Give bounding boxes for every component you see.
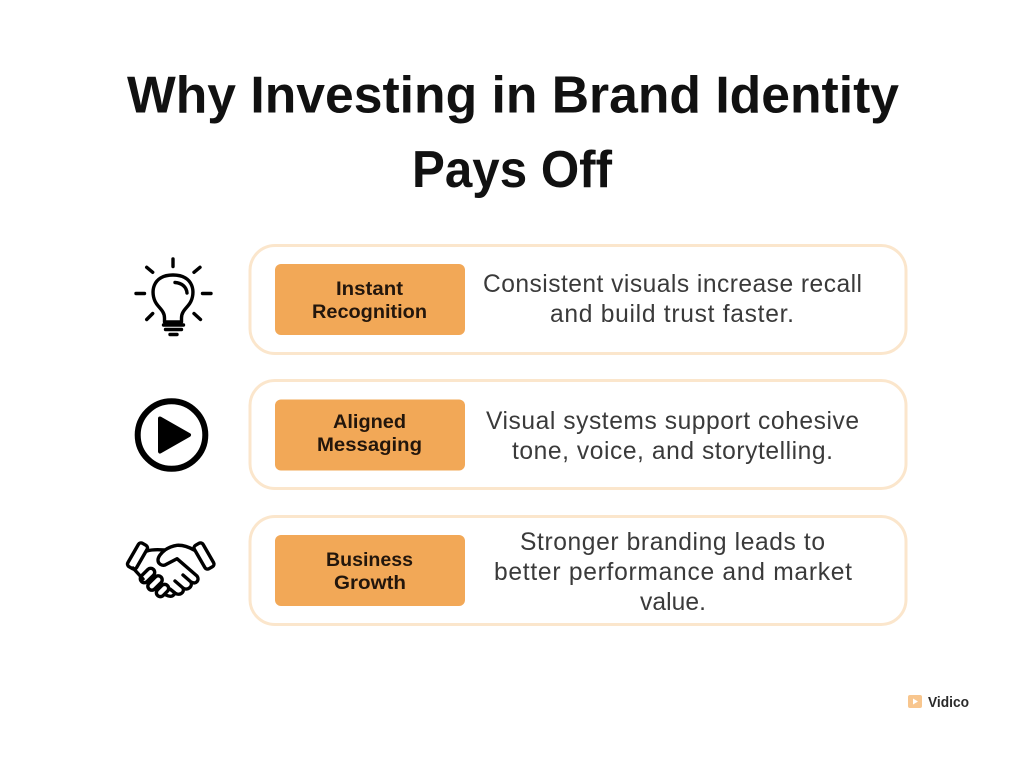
logo: Vidico: Vidico [928,695,969,711]
description: aligned messaging [486,408,859,465]
icon: handshake [126,542,215,598]
label: instant recognition: Recognition [312,301,427,323]
description: instant recognition [483,271,862,328]
title [127,66,899,199]
label: business growth: Business [326,549,413,571]
description: instant recognition: Consistent visuals increase recall [483,271,862,298]
description: business growth: better performance and market [494,559,852,586]
panel: aligned messaging [250,380,906,488]
label: instant recognition [275,264,465,335]
logo: Vidico [908,695,969,711]
description: business growth: Stronger branding leads to [520,529,825,556]
icon: play button [138,401,205,469]
panel: instant recognition [250,246,906,354]
title: Pays Off [412,141,613,199]
label: instant recognition: Instant [336,278,404,300]
description: instant recognition: and build trust faster. [550,301,794,328]
description: business growth: value. [640,589,706,616]
label: aligned messaging: Aligned [333,411,406,433]
label: aligned messaging: Messaging [317,434,422,456]
label: business growth: Growth [334,572,406,594]
label: aligned messaging [275,400,465,470]
description: aligned messaging: Visual systems support cohesive [486,408,859,435]
panel: business growth [250,516,906,624]
icon: light bulb [136,259,211,334]
description: business growth [494,529,852,616]
label: business growth [275,535,465,606]
title: Why Investing in Brand Identity [127,66,899,124]
description: aligned messaging: tone, voice, and storytelling. [512,438,833,465]
